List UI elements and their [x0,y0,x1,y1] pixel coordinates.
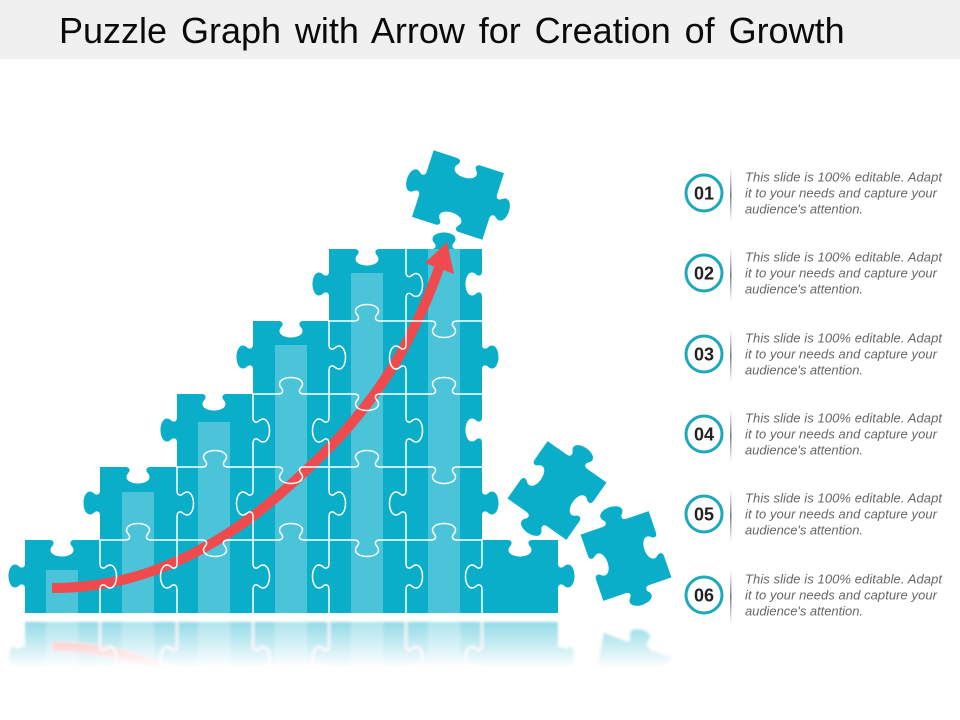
list item 04: This slide is 100% editable. Adapt [745,410,943,426]
list item 02 [686,248,943,302]
list item 03: audience's attention. [745,362,863,378]
list item 06: it to your needs and capture your [745,588,938,602]
loose puzzle piece: middle [498,428,616,553]
list item 06: audience's attention. [745,604,863,618]
list item 02: it to your needs and capture your [745,266,938,280]
list item 04: it to your needs and capture your [745,426,938,442]
growth arrow [52,242,454,588]
reflected bottom row [8,620,574,664]
list item 01: This slide is 100% editable. Adapt [745,170,943,184]
list item 01 [686,168,943,222]
list item 01: audience's attention. [745,202,863,216]
light bars [46,249,460,613]
reflected light bars [44,621,462,654]
list item 06: This slide is 100% editable. Adapt [745,572,943,586]
list item 02: This slide is 100% editable. Adapt [745,250,943,264]
list item 03: it to your needs and capture your [745,346,938,362]
loose puzzle piece: right [575,496,677,616]
list item 05: 05 [694,504,714,524]
list item 05: audience's attention. [745,522,863,538]
chart reflection [8,620,672,664]
puzzle chart with arrow and pieces [8,145,677,616]
loose puzzle piece: top [396,145,520,245]
list item 04: audience's attention. [745,442,863,458]
list item 01: 01 [694,184,714,204]
reflected joints [96,620,486,662]
list item 03: This slide is 100% editable. Adapt [745,330,943,346]
reflected arrow [50,640,158,664]
list item 03: 03 [694,344,714,364]
list item 04: 04 [694,424,714,444]
title: Puzzle Graph with Arrow for Creation of Growth [59,10,845,51]
list item 05: it to your needs and capture your [745,506,938,522]
puzzle piece joints [99,248,483,614]
puzzle staircase base [8,232,574,613]
list item 02: audience's attention. [745,282,863,296]
title bar [0,0,960,59]
list item 06 [686,570,943,624]
list item 01: it to your needs and capture your [745,186,938,200]
list item 05 [686,489,943,543]
reflected loose piece [598,628,672,664]
list item 04 [686,409,943,463]
list item 03 [686,329,943,383]
list item 05: This slide is 100% editable. Adapt [745,490,943,506]
list item 02: 02 [694,264,714,284]
list item 06: 06 [694,586,714,606]
